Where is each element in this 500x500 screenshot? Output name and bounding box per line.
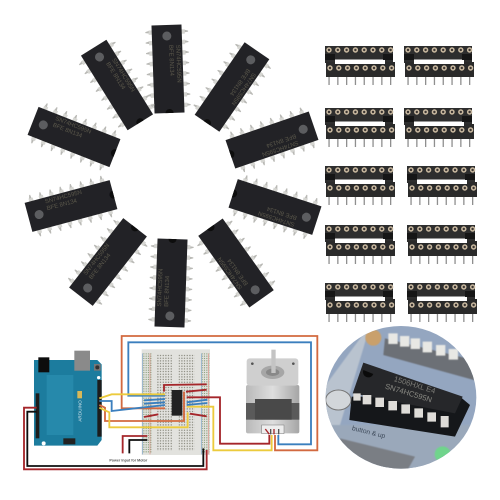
chip: lower left: SN74HC595N [83, 243, 111, 277]
chip: lower right: BFE 8N134 [227, 257, 250, 286]
silkscreen text: button & up [351, 425, 386, 440]
chip: upper right [189, 39, 275, 135]
chip: left upper [25, 101, 123, 173]
breadboard IC [172, 390, 182, 416]
chip: lower left: BFE 8N134 [88, 252, 113, 281]
socket base [349, 397, 470, 437]
chip: bottom [148, 238, 194, 328]
chip: upper left [76, 36, 158, 134]
socket row 1 left [325, 46, 395, 85]
chip: left upper: BFE 8N134 [52, 123, 83, 140]
chip: bottom: SN74HC595N [157, 269, 164, 307]
panel: ten DIP sockets [325, 46, 477, 322]
lower blurred chip [340, 438, 415, 469]
IC pins [353, 393, 449, 427]
socket row 4 right [407, 225, 477, 264]
chip: upper right: SN74HC595N [230, 71, 256, 106]
chip: right upper: BFE 8N134 [265, 132, 297, 148]
breadboard [142, 349, 210, 455]
panel: wiring diagram [24, 336, 317, 469]
Arduino board: ARDUINO [77, 400, 82, 422]
chip: lower left [64, 214, 152, 310]
chip: right lower: BFE 8N134 [266, 205, 298, 220]
chip: lower right: SN74HC595N [217, 256, 244, 290]
chip: left lower: SN74HC595N [44, 190, 83, 205]
chip: right upper [223, 105, 321, 175]
chip: right lower: SN74HC595N [258, 209, 296, 227]
wires [24, 336, 317, 469]
chip: top [145, 24, 191, 114]
socket row 3 right [407, 166, 477, 205]
chip: left lower: BFE 8N134 [46, 198, 78, 212]
green LED [435, 446, 451, 462]
chip: upper right: BFE 8N134 [228, 67, 251, 97]
chip: left lower [23, 174, 119, 238]
orange component [365, 330, 381, 346]
socket row 5 right [407, 283, 477, 322]
chip: left upper: SN74HC595N [54, 116, 92, 136]
chip: upper left: BFE 8N134 [104, 61, 126, 92]
chip: right upper: SN74HC595N [261, 139, 299, 157]
socket row 1 right [404, 46, 474, 85]
socket row 2 right [404, 108, 474, 147]
chip: lower right [193, 215, 279, 311]
chip: right lower [227, 173, 323, 241]
label: power input: Power Input for Motor [109, 458, 148, 462]
socket row 4 left [325, 225, 395, 264]
IC body [353, 363, 463, 413]
chip: top: BFE 8N134 [167, 45, 174, 77]
stepper motor [246, 350, 299, 434]
photo background [320, 325, 480, 472]
capacitor [326, 390, 351, 410]
upper blurred chip [383, 338, 480, 382]
socket row 5 left [325, 283, 395, 322]
IC marking: 1506HXL E4 [393, 374, 437, 396]
socket row 2 left [325, 108, 395, 147]
socket row 3 left [325, 166, 395, 205]
panel: circular photo of SN74HC595N in socket: SN74HC595N [384, 382, 433, 404]
chip: bottom: BFE 8N134 [164, 275, 171, 307]
panel: circular photo of SN74HC595N in socket [320, 325, 480, 472]
Arduino board [34, 351, 102, 446]
chip: upper left: SN74HC595N [110, 58, 135, 93]
panel: ring of ten DIP IC chips [23, 24, 323, 328]
chip: top: SN74HC595N [174, 45, 181, 83]
